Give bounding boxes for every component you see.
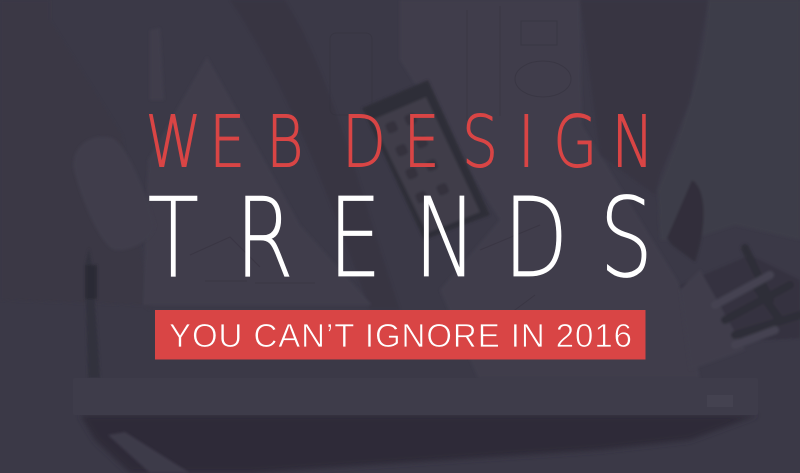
mouse bbox=[73, 137, 155, 250]
title line: WEB DESIGN: WEB DESIGN bbox=[146, 101, 654, 184]
subtitle banner: YOU CAN’T IGNORE IN 2016 bbox=[169, 317, 632, 354]
cup of pens bbox=[680, 248, 800, 370]
pencil top bbox=[150, 28, 164, 100]
sketches on paper bbox=[190, 6, 571, 325]
title line: TRENDS: TRENDS bbox=[148, 175, 653, 303]
phone bbox=[362, 80, 490, 240]
laptop edge and shadow bbox=[73, 378, 758, 473]
pen bbox=[85, 248, 100, 378]
